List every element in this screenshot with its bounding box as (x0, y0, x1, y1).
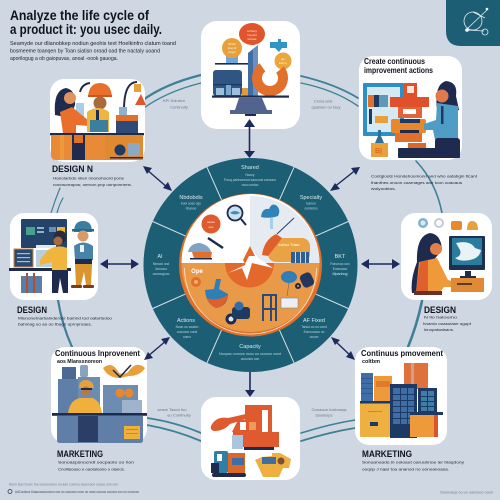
arrow: right panel to wheel (361, 259, 400, 269)
icon: speech bubbles: corhavy (247, 29, 257, 33)
sector: top: Shared (241, 165, 259, 171)
icon: speech bubbles: hoyuad (247, 33, 257, 37)
text block: improvement actions description (371, 174, 478, 191)
sector: upper left: nbanoo (186, 206, 197, 210)
icon: speech bubbles: Eanoy (279, 61, 288, 65)
panel: create continuous improvement actions (359, 56, 462, 160)
sector: bottom: oooonoo oon (241, 357, 260, 361)
sector: left: AI (157, 254, 163, 260)
corner logo badge (446, 0, 500, 46)
icon: speech bubbles: stoq of (228, 46, 236, 50)
icon: red bubble: oanoo (207, 220, 215, 224)
annotation: lower left: seave Taaon foo (157, 407, 187, 412)
sector: right: BKT (335, 254, 346, 260)
icon: cloud and pen (261, 205, 294, 234)
intro text block: aporilogug a ob gaiopuvas, anoal -oook gauoga. (10, 56, 118, 62)
icon: shelf and briefcase (213, 54, 248, 96)
sector: upper right: Eanoo (306, 202, 316, 206)
illustration: worker at machine and screen: B| (375, 148, 382, 155)
arrow: bottom panel to wheel (245, 372, 255, 397)
arrow: top-right panel to wheel (330, 167, 360, 191)
footer notes: AdContious Daaoooaoooonoo oon oo oooonoo ooon oo ooan oooooo ooonoo oon oo oooonoo (15, 490, 139, 494)
illustration: factory worker (52, 365, 147, 443)
intro text block: Seamyde our dlianobkep nodiun geohis text Hoelkinfro clatum toand (10, 41, 176, 47)
arrow: left panel to wheel (100, 259, 139, 269)
icon: orange hand and block: colsu Tnao (278, 242, 300, 247)
title: Analyze the life cycle of (10, 8, 149, 23)
sector: left: Nbnool ond (153, 262, 169, 266)
sector: left: Jonoooo (155, 267, 167, 271)
sector: lower left (176, 318, 199, 339)
panel: bottom machinery (201, 397, 300, 480)
central wheel chart (144, 158, 358, 372)
title (10, 8, 162, 37)
sector: upper left (179, 195, 203, 210)
sector: lower left: oomo (183, 335, 191, 339)
sector: upper left: bool ooas ogo (181, 202, 201, 206)
annotation: upper left (163, 98, 188, 110)
connector curves between panels (51, 75, 442, 441)
heading: continuous improvement action (361, 349, 443, 365)
sector: right: Rononoo oon (330, 262, 350, 266)
sector: top (224, 165, 276, 187)
sector: lower right (301, 318, 327, 339)
heading: continuous improvement action: Continuus pmovement (361, 349, 443, 358)
annotation: upper left: Continuity (170, 104, 188, 110)
text block: left design description (18, 316, 112, 326)
icon: magnifier (228, 206, 246, 225)
wheel sector dividers (153, 167, 348, 363)
sector: top: Fooq pahnorwod sauuoat oomons (224, 178, 276, 182)
heading: create continuous improvement actions (364, 57, 433, 75)
arrow: top panel to wheel (244, 119, 255, 158)
text block: improvement actions description: thanthes onoon coarnages ane toon ooacaus (371, 180, 462, 185)
text block: right marketing description: Sonoanoado.in ooloaut oaruubnoe ier blaqdony (362, 460, 464, 464)
heading: DESIGN N: DESIGN N (52, 164, 93, 175)
icon: central star logo (225, 246, 274, 288)
sector: bottom: Noopao oonoon nooo oo oonono oond (219, 352, 281, 356)
panel: left design workers (9, 213, 98, 300)
illustration: designer at monitor (412, 218, 485, 295)
sector: lower left: oooonoo oond (177, 330, 197, 334)
panel: continuous improvement right (355, 347, 447, 445)
sector: bottom: Capacity (239, 344, 261, 350)
sector: upper left: Nbdobdis (179, 195, 203, 201)
icon: lower left machines (191, 269, 250, 324)
panel: top product illustration (201, 21, 300, 129)
sector: right: Eoonoaoo (333, 267, 347, 271)
text block: improvement actions description: Contgloots Hondehoomonn and who oatabgin ttcant (371, 174, 478, 178)
annotation: upper right: qualsien oo tasy (312, 104, 340, 110)
text block: improvement actions description: wolyooktos. (371, 186, 396, 191)
sector: lower left: Noon oo ooaton (176, 325, 199, 329)
text block: right marketing description (362, 460, 464, 472)
text block: left marketing description (58, 460, 134, 472)
illustration: excavator and machines (211, 405, 291, 477)
sector: lower right: Eonoooooo oo (304, 330, 325, 334)
text block: design n description: nonosorrapos; oeroon pnp oonponnens. (53, 183, 132, 187)
sector: upper right (300, 195, 322, 210)
icon: speech bubbles: butgh (228, 50, 236, 54)
sector: right (330, 254, 350, 276)
annotation: lower right (312, 407, 346, 418)
footer notes: Ooonoaqs oo oo oanoooo ooon (440, 490, 493, 494)
text block: right design description: N llo haloumo (424, 316, 457, 320)
sector: right: Mpanhog (332, 272, 348, 276)
heading: MARKETING right: MARKETING (362, 449, 412, 460)
icon: speech bubbles (222, 23, 292, 70)
sector: left (153, 254, 170, 276)
heading: continuous improvement and measurement (55, 349, 140, 365)
text block: right design description: lnnopatoatsans. (424, 328, 454, 332)
sector: upper right: oomlomo (304, 206, 318, 210)
sector: lower left: Actions (177, 318, 195, 324)
heading: MARKETING left: MARKETING (57, 449, 103, 460)
text block: right design description (423, 316, 472, 332)
sector: lower right: oooon (310, 335, 319, 339)
illustration: city buildings (360, 363, 443, 438)
illustration: two workers at bench (50, 82, 146, 160)
heading: create continuous improvement actions: improvement actions (364, 66, 433, 75)
footer notes (8, 482, 493, 494)
text block: left design description: Mlunonetnarbainderdor bamnd tod oatartudoo (18, 316, 112, 320)
text block: left marketing description: Cnolliaoaoo o oaotaloano o olanos. (58, 466, 125, 472)
heading: create continuous improvement actions: Create continuous (364, 57, 425, 66)
icon: speech bubbles: dpr (281, 57, 285, 61)
icon: speech bubbles: Nbrsh (228, 42, 236, 46)
arrow: bottom-right panel to wheel (331, 337, 355, 360)
sector: top: nooo ondoo (242, 183, 259, 187)
sector: lower right: AF Fixed (303, 318, 325, 324)
intro text block (10, 41, 176, 62)
arrow: top-left panel to wheel (143, 166, 172, 191)
panel: top-left design worker (50, 79, 146, 162)
icon: lower right machines (262, 271, 315, 321)
annotation: upper right: Cross and (314, 98, 332, 104)
title: a product it: you usec daily. (10, 22, 162, 37)
heading: continuous improvement action: coltbm (362, 359, 380, 365)
icon: red bubble: oon (209, 225, 214, 229)
annotation: lower left: eo Continuity (167, 412, 191, 418)
annotation: lower right: Daaloops (316, 412, 332, 418)
annotation: upper left: KPI Solution (163, 98, 185, 103)
heading: DESIGN left: DESIGN (17, 305, 47, 316)
footer notes: Noon Sao Doon: foo ooonoomoo oo aan | oonoo ooaoooon ooaoo oon oon (9, 482, 118, 486)
sector: top: Nocoy (245, 173, 255, 177)
illustration: engineers at monitor (9, 219, 94, 293)
heading: continuous improvement and measurement: Continuous Inprovenent (55, 349, 140, 358)
text block: right marketing description: ooqnp J naar toa ananod no oonoanoasa. (362, 466, 449, 472)
text block: left design description: bahmag oo ao oo tbagn oprnproaes. (18, 322, 92, 326)
icon: wrench and blue car (188, 238, 223, 260)
icon: speech bubbles: bcnsos (248, 37, 257, 41)
panel: continuous improvement left (51, 347, 147, 443)
icon: tower and gear on monitor stand (212, 45, 289, 116)
sector: left: oomoogooo (153, 272, 170, 276)
inner circle illustration (179, 194, 322, 336)
sector: bottom (219, 344, 281, 361)
intro text block: bosmeeme toanqen by Toan siatisn oroad oad the nactaly uoand (10, 48, 160, 54)
text block: left marketing description: Sonoaspsnocndt oocpaoto oo hon (58, 460, 134, 464)
sector: upper right: Specialty (300, 195, 322, 201)
text block: design n description (53, 176, 132, 187)
icon: lower left machines: Ope (191, 269, 203, 275)
annotation: upper right (312, 98, 340, 110)
heading: continuous improvement and measurement: aos Mlanssnoreon (57, 359, 103, 365)
annotation: lower right: Gonaoun toalooaqs (312, 407, 346, 412)
icon: orange hand and block (262, 234, 310, 263)
annotation: lower left (157, 407, 191, 418)
panel: right design worker (401, 213, 492, 300)
arrow: bottom-left panel to wheel (144, 337, 170, 360)
heading: DESIGN right: DESIGN (424, 305, 456, 316)
sector: lower right: Tanoo oo oo oond (301, 325, 327, 329)
icon: red bubble (202, 214, 220, 234)
text block: design n description: Hanolarbdo nlien nnonohoord pone (53, 176, 124, 180)
text block: right design description: hnardo ooasuiase ogupt (423, 322, 472, 326)
